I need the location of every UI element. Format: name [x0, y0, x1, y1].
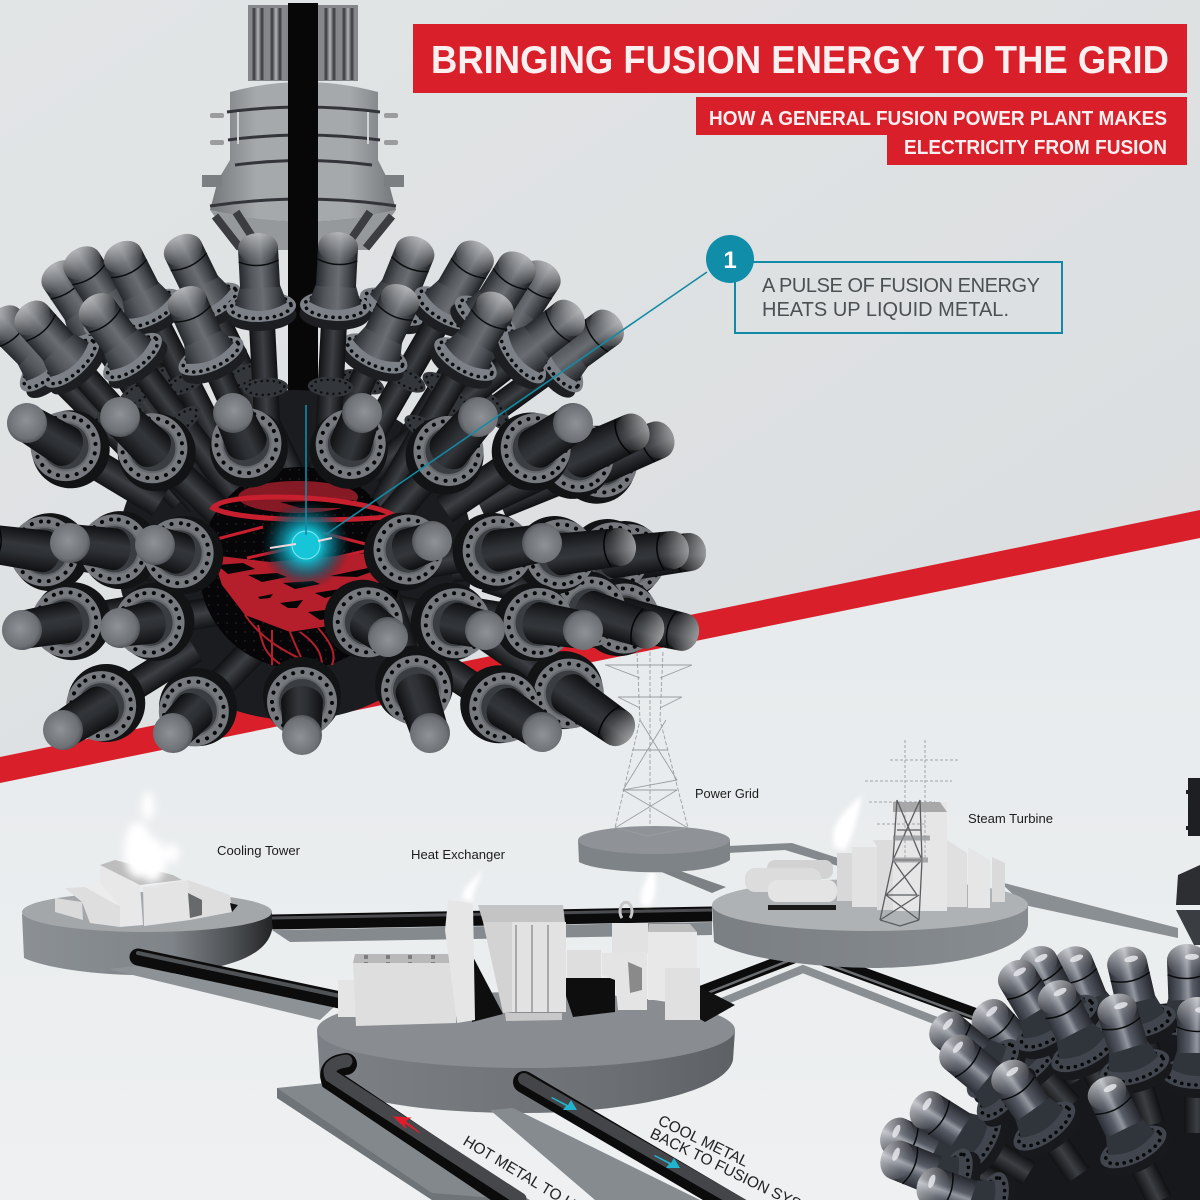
- callout 1: fusion pulse: A PULSE OF FUSION ENERGY: [762, 275, 1040, 297]
- pipe: hot metal to fusion machine: [277, 1061, 530, 1200]
- machine body mass: [990, 1003, 1200, 1200]
- platform: steam turbine: [712, 879, 1028, 968]
- upper injector stack: [202, 5, 404, 250]
- outer pistons: [0, 221, 640, 545]
- callout leader lines: [306, 272, 707, 535]
- title banner: [413, 24, 1187, 93]
- background: upper panel: [0, 0, 1200, 800]
- building: heat exchanger plant: [338, 900, 735, 1026]
- title banner: BRINGING FUSION ENERGY TO THE GRID: [431, 39, 1169, 82]
- platform: cooling tower: [22, 892, 272, 975]
- callout 1: fusion pulse: 1: [723, 247, 737, 274]
- machine body mass: [117, 390, 473, 720]
- lower cone struts: [210, 210, 396, 250]
- steam: steam turbine: [833, 795, 862, 850]
- label: cool metal: COOL METAL: [655, 1112, 751, 1171]
- label: power grid: Power Grid: [695, 786, 759, 801]
- steam: cooling tower: [124, 792, 179, 882]
- reactor sphere: [199, 467, 401, 669]
- subtitle banner: ELECTRICITY FROM FUSION: [904, 137, 1167, 159]
- arrow: cool metal upper: [551, 1097, 577, 1110]
- subtitle banner: HOW A GENERAL FUSION POWER PLANT MAKES: [709, 108, 1167, 130]
- ring housing: [202, 82, 404, 221]
- platform: power grid: [578, 826, 730, 872]
- conduit: grid to steam turbine: [652, 843, 1178, 938]
- energy pulse: cyan glow: [262, 501, 350, 589]
- pipe: cool metal back to fusion system: [490, 1079, 750, 1200]
- building: steam turbine plant: [745, 802, 1005, 911]
- steam: heat exchanger: [462, 865, 656, 906]
- pistons: [867, 932, 1200, 1200]
- arrow: hot metal direction: [394, 1117, 420, 1133]
- background: lower floor: [0, 538, 1200, 800]
- callout 1: fusion pulse: [706, 235, 1062, 333]
- pipe: cooling tower to steam turbine: [272, 910, 712, 942]
- fusion machine: [0, 221, 711, 776]
- label: heat exchanger: Heat Exchanger: [411, 847, 506, 862]
- building: cooling tower plant: [55, 860, 238, 927]
- platform: heat exchanger: [317, 992, 735, 1113]
- inner pistons: [123, 379, 464, 755]
- pylon: power grid: [605, 652, 692, 836]
- label: steam turbine: Steam Turbine: [968, 811, 1053, 826]
- central black column: [288, 3, 318, 480]
- pylon: steam turbine: [865, 740, 958, 926]
- pipes: heat exchanger to steam turbine and fusion machine: [700, 959, 976, 1024]
- red diagonal band: [0, 510, 1200, 783]
- arrow: cool metal lower: [654, 1155, 680, 1168]
- plant floor diagram: [22, 652, 1178, 1200]
- second fusion machine, lower right: [867, 932, 1200, 1200]
- distant stack: second fusion machine top: [1176, 778, 1200, 945]
- middle pistons: [0, 375, 711, 776]
- subtitle banner: [696, 97, 1187, 165]
- callout 1: fusion pulse: HEATS UP LIQUID METAL.: [762, 299, 1009, 321]
- label: cooling tower: Cooling Tower: [217, 843, 301, 858]
- plasma liner: red helix: [212, 481, 395, 666]
- pipe: cooling tower to heat exchanger: [108, 953, 340, 1020]
- lattice crown: [248, 5, 358, 81]
